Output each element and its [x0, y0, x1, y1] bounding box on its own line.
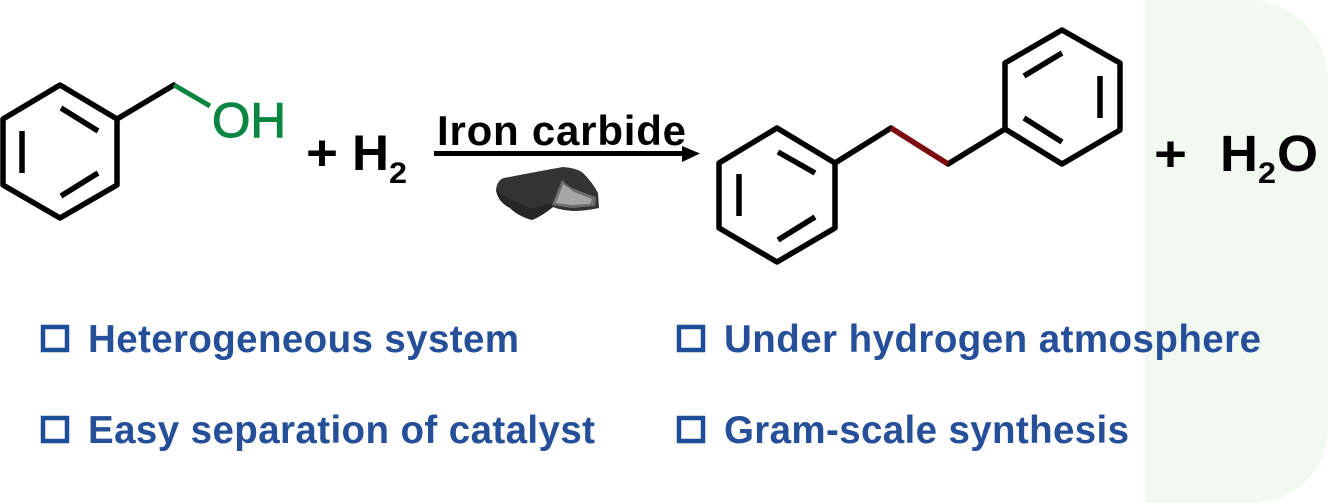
hydrogen reagent — [306, 125, 407, 190]
feature: gram-scale synthesis: Gram-scale synthesis — [724, 409, 1129, 452]
icon: iron carbide particle — [496, 167, 599, 220]
hydrogen reagent: + — [306, 125, 338, 181]
panel: pale green background — [1145, 0, 1328, 503]
reactant: benzyl alcohol — [3, 85, 286, 218]
hydroxyl label: OH — [212, 94, 286, 148]
benzene ring — [3, 85, 117, 218]
red new carbon bond — [891, 128, 948, 164]
feature: under hydrogen atmosphere: Under hydrogen atmosphere — [724, 318, 1261, 361]
water by-product — [1154, 125, 1318, 190]
feature: heterogeneous system: Heterogeneous system — [88, 318, 519, 361]
water by-product: H — [1220, 125, 1258, 182]
catalyst label: Iron carbide — [437, 107, 686, 154]
right benzene ring — [1005, 30, 1120, 164]
water by-product: O — [1277, 125, 1318, 182]
carbon bond — [117, 85, 174, 119]
product: bibenzyl — [719, 30, 1120, 262]
water by-product: + — [1154, 126, 1187, 182]
hydrogen reagent: H — [352, 125, 389, 181]
left benzene ring — [719, 128, 835, 262]
hydrogen reagent: 2 — [389, 157, 407, 190]
water by-product: 2 — [1258, 157, 1276, 190]
reaction arrow — [434, 146, 700, 162]
black chain bonds — [835, 128, 1005, 164]
green bond to hydroxyl — [174, 85, 210, 106]
feature: easy separation of catalyst: Easy separation of catalyst — [88, 409, 595, 452]
